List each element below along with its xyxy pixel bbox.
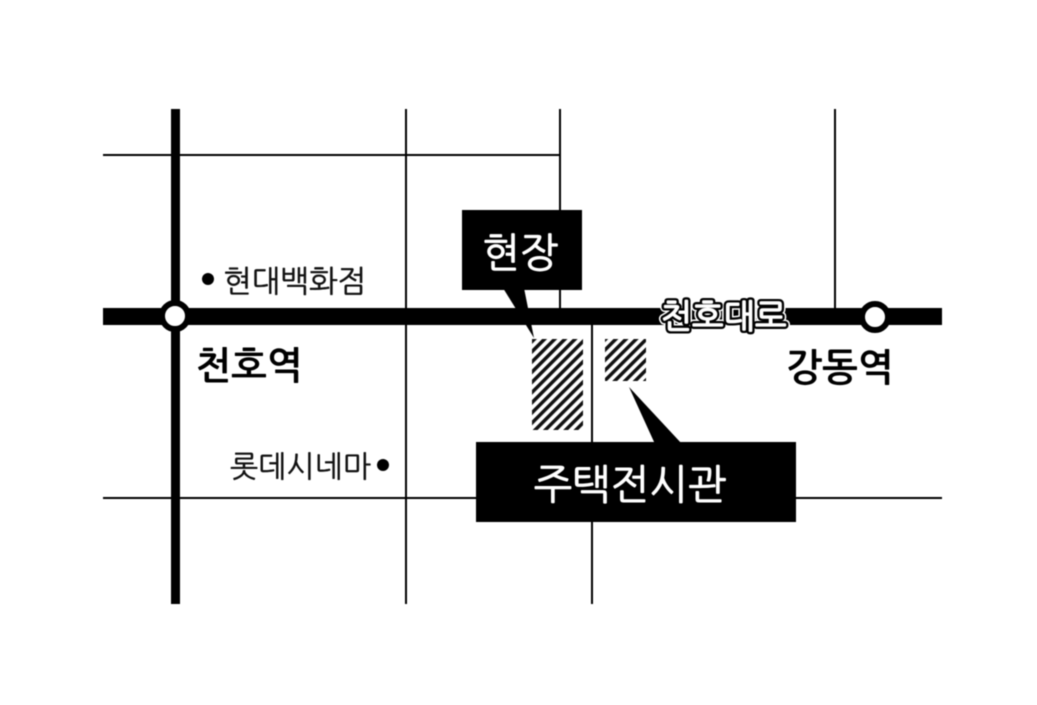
hatched block: housing exhibition hall (605, 339, 646, 381)
station marker: 천호역 (162, 303, 188, 329)
label: 천호대로: 천호대로 (661, 299, 786, 336)
label: 강동역: 강동역 (786, 348, 894, 390)
callout: 현장: 현장 (482, 230, 558, 276)
label: 천호역: 천호역 (195, 346, 303, 388)
callout: 주택전시관: 주택전시관 (534, 462, 727, 508)
hatched block: site (532, 339, 583, 430)
station marker: 강동역 (862, 304, 888, 330)
callout: 주택전시관 (476, 387, 796, 522)
subway line (171, 109, 180, 604)
main road: 천호대로 (103, 308, 942, 325)
label: 천호대로: 천호대로 (661, 299, 786, 336)
callout: 현장 (462, 210, 582, 338)
thin road grid (103, 109, 942, 604)
label: 천호대로: 천호대로 (661, 299, 786, 336)
landmark: 롯데시네마: 롯데시네마 (230, 451, 371, 484)
landmark: 현대백화점: 현대백화점 (223, 265, 366, 299)
